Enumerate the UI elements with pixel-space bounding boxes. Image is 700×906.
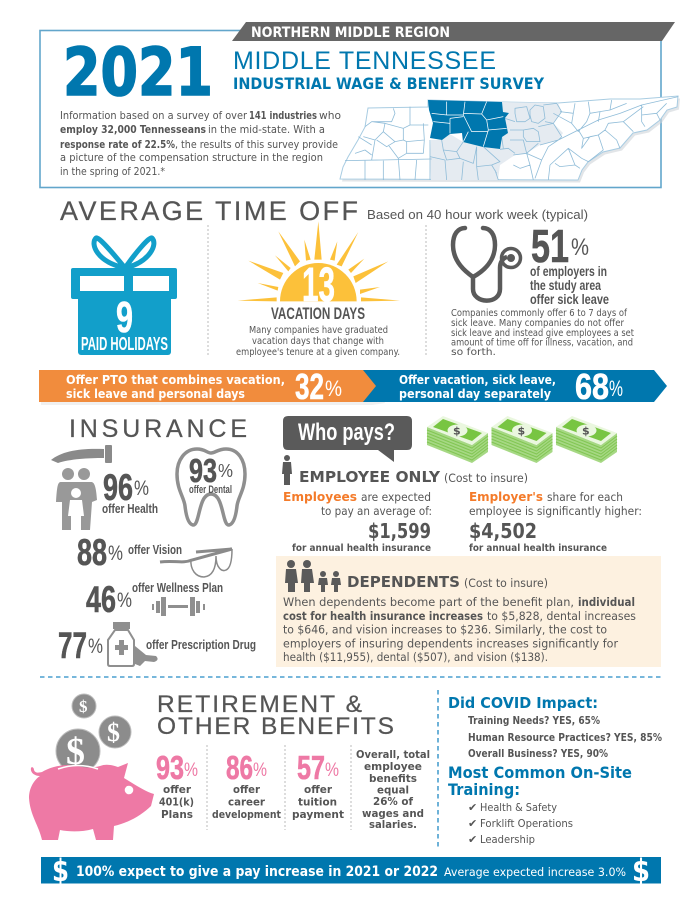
icon: piggy bank [29, 694, 154, 840]
title year: 2021 [63, 34, 213, 111]
panel: covid impact: Did COVID Impact: [448, 694, 598, 712]
stat: 88 vision [77, 532, 232, 577]
intro text: who [319, 109, 341, 122]
icon: tooth dental: % [218, 461, 233, 481]
stat: 88 vision: offer Vision [128, 542, 182, 557]
panel: dependents [276, 556, 661, 667]
text: overall benefits: Overall, total [356, 749, 430, 761]
arrow: blue separate: Offer vacation, sick leave, [399, 372, 556, 387]
heading: insurance: INSURANCE [69, 415, 247, 443]
stat: 93 401k: 401(k) [159, 796, 194, 808]
intro text: in the mid-state. With a [208, 123, 325, 136]
text: dependents body: employers of insuring dependents increases significantly for [283, 636, 618, 650]
callout: who pays [283, 416, 412, 462]
arrow: orange PTO: sick leave and personal days [66, 386, 245, 401]
heading: employee only: (Cost to insure) [444, 471, 528, 485]
text: employees pay: are expected [361, 490, 431, 504]
icon: stethoscope sick leave: offer sick leave [530, 291, 609, 307]
icon: glasses [160, 549, 232, 577]
text: overall benefits [356, 749, 430, 831]
text: employees pay [283, 489, 432, 554]
text: dependents body: to $646, and vision increases to $236. Similarly, the cost to [283, 622, 607, 636]
icon: money stacks [427, 416, 617, 463]
heading: retirement and other benefits: RETIREMENT & [157, 691, 362, 718]
panel: covid impact: Training Needs? YES, 65% [468, 715, 600, 727]
icon: family of four [285, 560, 341, 592]
banner: pay increase: $ [632, 853, 650, 889]
icon: piggy bank: $ [107, 718, 120, 747]
text: dependents body: to $5,828, dental increases [487, 609, 636, 623]
text: employees pay: $1,599 [368, 519, 431, 543]
title: MIDDLE TENNESSEE [233, 47, 496, 75]
banner: PTO vs separate [39, 366, 667, 407]
text: dependents body [283, 595, 636, 664]
text: employees pay: for annual health insurance [292, 543, 431, 554]
icon: stethoscope sick leave: amount of time off for illness, vacation, and [451, 338, 633, 348]
text: overall benefits: salaries. [369, 819, 417, 831]
icon: sun vacation days: VACATION DAYS [271, 304, 365, 323]
heading: employee only [299, 468, 528, 486]
panel: on-site training [448, 763, 632, 846]
stat: 77 prescription: % [88, 635, 103, 658]
icon: employee person [282, 455, 292, 485]
panel: on-site training: Forklift Operations [480, 817, 573, 830]
heading: average time off [60, 196, 588, 226]
stat: 86 career: % [253, 760, 267, 781]
text: overall benefits: equal [377, 784, 409, 796]
arrow: orange PTO [39, 366, 376, 407]
stat: 57 tuition: payment [292, 809, 344, 821]
arrow: blue separate: personal day separately [399, 386, 551, 401]
stat: 46 wellness [86, 579, 223, 620]
heading: average time off: AVERAGE TIME OFF [60, 196, 358, 226]
icon: tooth dental: 93 [189, 452, 217, 489]
text: employer share [469, 489, 642, 554]
arrow: orange PTO: % [325, 376, 342, 401]
panel: on-site training: Training: [448, 780, 520, 799]
icon: stethoscope sick leave: % [571, 234, 589, 261]
stat: 77 prescription [58, 622, 256, 666]
text: overall benefits: wages and [362, 808, 424, 820]
text: employees pay: Employees [283, 489, 357, 504]
icon: sun vacation days: employee's tenure at a given company. [236, 347, 400, 358]
icon: gift paid holidays: 9 [116, 293, 133, 342]
stat: 86 career: development [212, 809, 281, 821]
icon: tooth dental: offer Dental [189, 484, 232, 496]
heading: average time off: Based on 40 hour work week (typical) [367, 207, 588, 222]
heading: retirement and other benefits: OTHER BENEFITS [157, 713, 394, 740]
intro text: , the results of this survey provide [175, 138, 338, 151]
stat: 46 wellness: 46 [86, 579, 116, 620]
text: employer share: for annual health insurance [469, 543, 607, 554]
stat: 93 401k: 93 [156, 749, 184, 786]
stat: 46 wellness: % [117, 589, 132, 612]
stat: 77 prescription: offer Prescription Drug [146, 637, 256, 652]
icon: stethoscope sick leave: sick leave and instead give employees a set [451, 328, 634, 339]
text: dependents body: cost for health insurance increases [283, 609, 483, 623]
intro text [60, 109, 341, 178]
stat: 93 401k [156, 749, 198, 821]
stat: 86 career: offer [233, 784, 261, 796]
stat: 88 vision: 88 [77, 532, 107, 573]
text: overall benefits: benefits [369, 773, 417, 785]
icon: money stacks: $ [518, 424, 525, 438]
map: Tennessee counties [340, 96, 680, 182]
text: dependents body: individual [578, 595, 635, 609]
banner: northern middle region: NORTHERN MIDDLE REGION [251, 25, 450, 41]
heading: retirement and other benefits [157, 691, 394, 740]
stat: 77 prescription: 77 [58, 625, 87, 666]
icon: hand and family [51, 445, 112, 530]
stat: 96 health: offer Health [102, 501, 158, 516]
stat: 57 tuition: 57 [297, 749, 325, 786]
icon: sun vacation days: 13 [302, 259, 335, 312]
intro text: response rate of 22.5% [60, 138, 175, 151]
stat: 93 401k: Plans [161, 809, 193, 821]
icon: gift paid holidays: PAID HOLIDAYS [81, 334, 168, 354]
banner: pay increase [41, 853, 661, 889]
arrow: blue separate: 68 [575, 366, 609, 407]
icon: stethoscope sick leave: 51 [531, 220, 569, 272]
stat: 96 health [102, 467, 158, 516]
intro text: in the spring of 2021.* [60, 165, 165, 178]
intro text: Information based on a survey of over [60, 109, 247, 122]
stat: 88 vision: % [108, 542, 123, 565]
arrow: blue separate: % [609, 376, 623, 401]
panel: on-site training: ✔ [468, 801, 477, 814]
icon: stethoscope sick leave: of employers in [530, 263, 607, 279]
panel: covid impact: Human Resource Practices? YES, 85% [468, 732, 662, 744]
banner: pay increase: $ [52, 853, 69, 889]
icon: sun vacation days: vacation days that change with [252, 336, 384, 347]
text: employer share: $4,502 [469, 519, 537, 543]
stat: 57 tuition: offer [304, 784, 333, 796]
stat: 86 career: 86 [226, 749, 253, 786]
arrow: blue separate [358, 366, 667, 407]
text: overall benefits: employee [364, 761, 422, 773]
text: employer share: employee is significantly higher: [469, 504, 642, 518]
text: employees pay: to pay an average of: [321, 504, 432, 518]
icon: stethoscope sick leave: sick leave. Many companies do not offer [451, 318, 624, 329]
banner: pay increase: 100% expect to give a pay increase in 2021 or 2022 [76, 864, 438, 880]
heading: dependents: DEPENDENTS [347, 573, 460, 591]
panel: on-site training: ✔ [468, 833, 477, 846]
heading: employee only: EMPLOYEE ONLY [299, 468, 441, 486]
panel: on-site training: ✔ [468, 817, 477, 830]
text: employer share: share for each [547, 490, 623, 504]
text: dependents body: health ($11,955), dental ($507), and vision ($138). [283, 650, 548, 664]
icon: stethoscope sick leave [451, 220, 634, 358]
icon: stethoscope sick leave: Companies commonly offer 6 to 7 days of [451, 308, 628, 319]
arrow: orange PTO: 32 [295, 366, 324, 407]
text: overall benefits: 26% of [373, 796, 413, 808]
stat: 57 tuition: % [325, 760, 339, 781]
stat: 46 wellness: offer Wellness Plan [132, 580, 223, 595]
stat: 86 career: career [228, 796, 266, 808]
stat: 57 tuition [292, 749, 344, 821]
panel: on-site training: Most Common On-Site [448, 763, 632, 782]
icon: piggy bank: $ [79, 697, 88, 716]
heading: dependents [347, 573, 548, 591]
panel: header [40, 22, 680, 188]
stat: 93 401k: offer [163, 784, 192, 796]
panel: covid impact: Overall Business? YES, 90% [468, 748, 608, 760]
heading: dependents: (Cost to insure) [464, 576, 548, 590]
title: INDUSTRIAL WAGE & BENEFIT SURVEY [233, 74, 544, 93]
icon: money stacks: $ [582, 424, 590, 438]
intro text: 141 industries [249, 109, 317, 122]
panel: insurance [51, 415, 256, 666]
title [233, 47, 544, 93]
icon: dumbbell [152, 597, 205, 616]
panel: covid impact [448, 694, 662, 760]
icon: pill bottle [108, 622, 158, 666]
icon: stethoscope sick leave: so forth. [451, 347, 496, 358]
icon: gift paid holidays [71, 238, 177, 355]
intro text: a picture of the compensation structure in the region [60, 151, 323, 164]
stat: 86 career [212, 749, 281, 821]
icon: piggy bank: $ [66, 731, 85, 773]
stat: 57 tuition: tuition [298, 796, 337, 808]
intro text: employ 32,000 Tennesseans [60, 123, 206, 136]
callout: who pays: Who pays? [298, 419, 395, 446]
icon: stethoscope sick leave: the study area [530, 277, 601, 293]
text: dependents body: When dependents become part of the benefit plan, [283, 595, 574, 609]
panel: who pays [282, 416, 642, 554]
panel: on-site training: Leadership [480, 833, 535, 846]
icon: money stacks: $ [453, 424, 461, 438]
arrow: orange PTO: Offer PTO that combines vacation, [66, 372, 285, 387]
icon: sun vacation days: Many companies have graduated [249, 325, 388, 336]
banner: pay increase: Average expected increase 3.0% [444, 865, 626, 879]
icon: tooth dental [177, 449, 245, 525]
stat: 96 health: % [134, 477, 149, 500]
text: employer share: Employer's [469, 489, 543, 504]
panel: on-site training: Health & Safety [480, 801, 557, 814]
stat: 96 health: 96 [103, 467, 133, 508]
stat: 93 401k: % [184, 760, 198, 781]
icon: sun vacation days [236, 221, 400, 358]
banner: northern middle region [232, 22, 675, 41]
